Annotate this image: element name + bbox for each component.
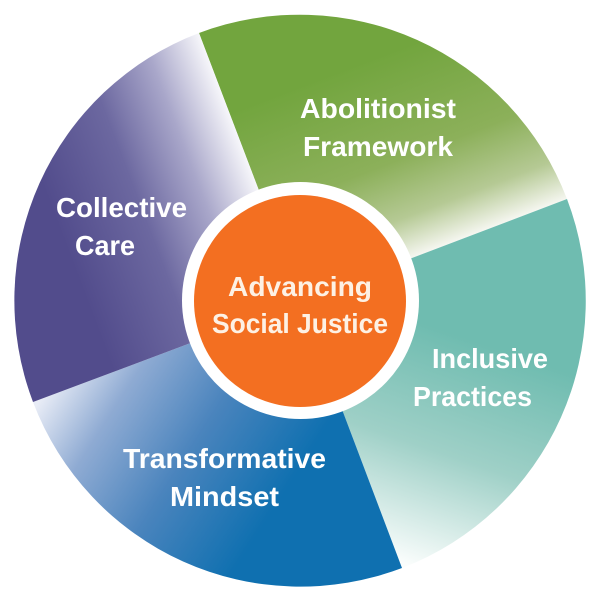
panel: Abolitionist Framework [199,15,567,300]
panel: Inclusive Practices: Practices [413,381,532,412]
panel: Abolitionist Framework: Framework [303,131,453,162]
center hub: Advancing Social Justice [182,182,419,419]
panel: Collective Care: Care [75,230,135,261]
panel: Transformative Mindset: Transformative [123,443,326,474]
panel: Collective Care [14,33,300,402]
panel: Inclusive Practices: Inclusive [432,343,548,374]
panel: Transformative Mindset [33,300,402,587]
panel: Collective Care: Collective [56,192,187,223]
panel: Transformative Mindset: Mindset [170,481,279,512]
panel: Abolitionist Framework: Abolitionist [300,93,456,124]
center hub: Advancing Social Justice: Advancing [228,271,372,302]
center hub: Advancing Social Justice: Social Justice [212,308,388,339]
panel: Inclusive Practices [300,199,586,568]
